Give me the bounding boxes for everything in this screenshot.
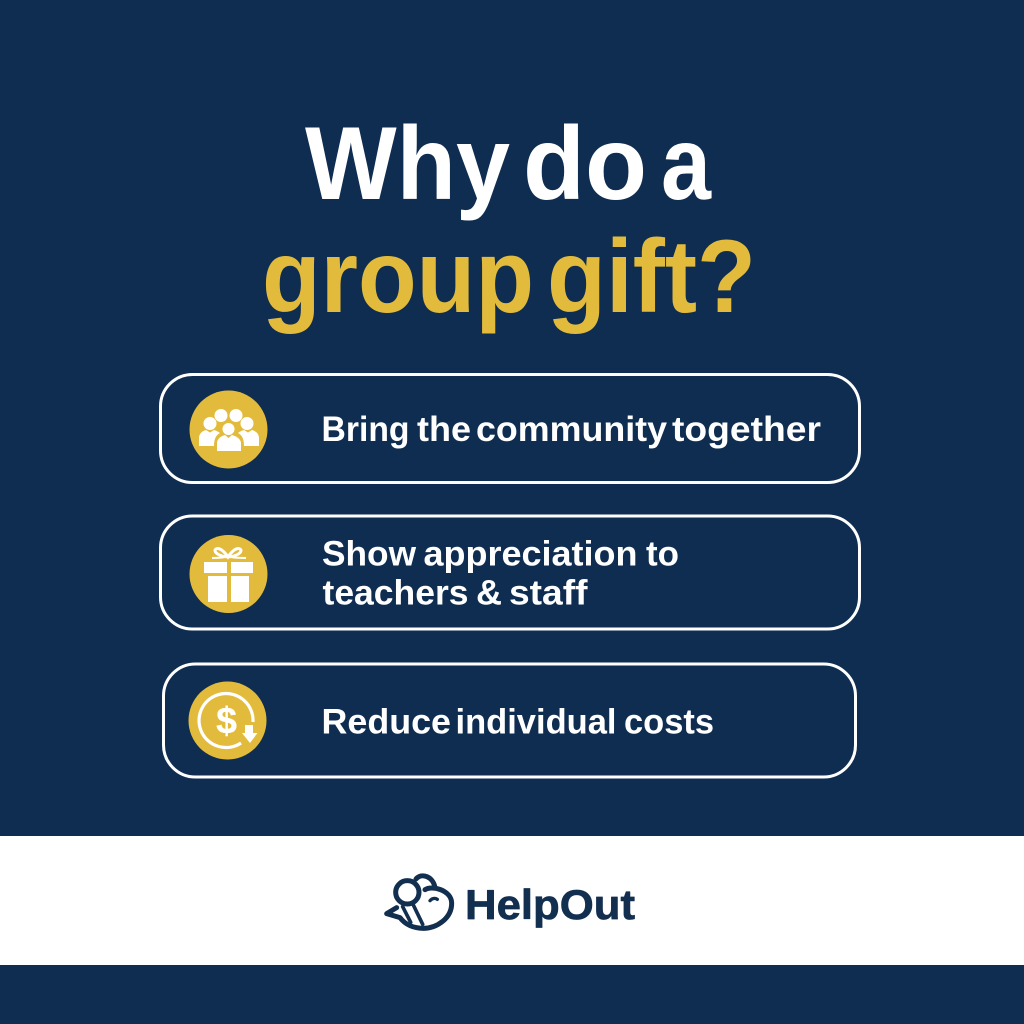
label: together: [672, 410, 821, 449]
label: the: [417, 410, 471, 449]
label: [322, 534, 679, 612]
title: group: [262, 219, 534, 335]
icon: dollar with down arrow: [188, 682, 266, 760]
label: &: [476, 574, 502, 612]
label: Reduce: [322, 702, 451, 742]
logo: bee icon: [387, 876, 452, 928]
label: teachers: [322, 574, 468, 612]
label: Show: [322, 534, 417, 574]
panel: bring the community together: [160, 374, 860, 482]
title: do: [523, 106, 647, 222]
icon: community group: [190, 390, 268, 468]
label: individual: [456, 702, 616, 742]
label: [322, 702, 714, 742]
title: Why: [305, 106, 510, 222]
icon: dollar with down arrow: $: [216, 700, 237, 741]
label: staff: [509, 574, 588, 612]
footer band: [0, 836, 1024, 965]
label: appreciation: [424, 534, 638, 574]
title: gift?: [547, 219, 756, 335]
logo: wordmark: HelpOut: [465, 881, 635, 928]
label: to: [646, 534, 679, 574]
label: community: [476, 410, 668, 449]
panel: show appreciation: [160, 516, 860, 629]
panel: reduce costs: [164, 664, 856, 777]
label: Bring: [322, 410, 410, 449]
title: a: [661, 106, 712, 222]
icon: gift box: [190, 535, 268, 613]
label: [322, 410, 821, 449]
title: [262, 106, 756, 335]
label: costs: [624, 702, 714, 742]
